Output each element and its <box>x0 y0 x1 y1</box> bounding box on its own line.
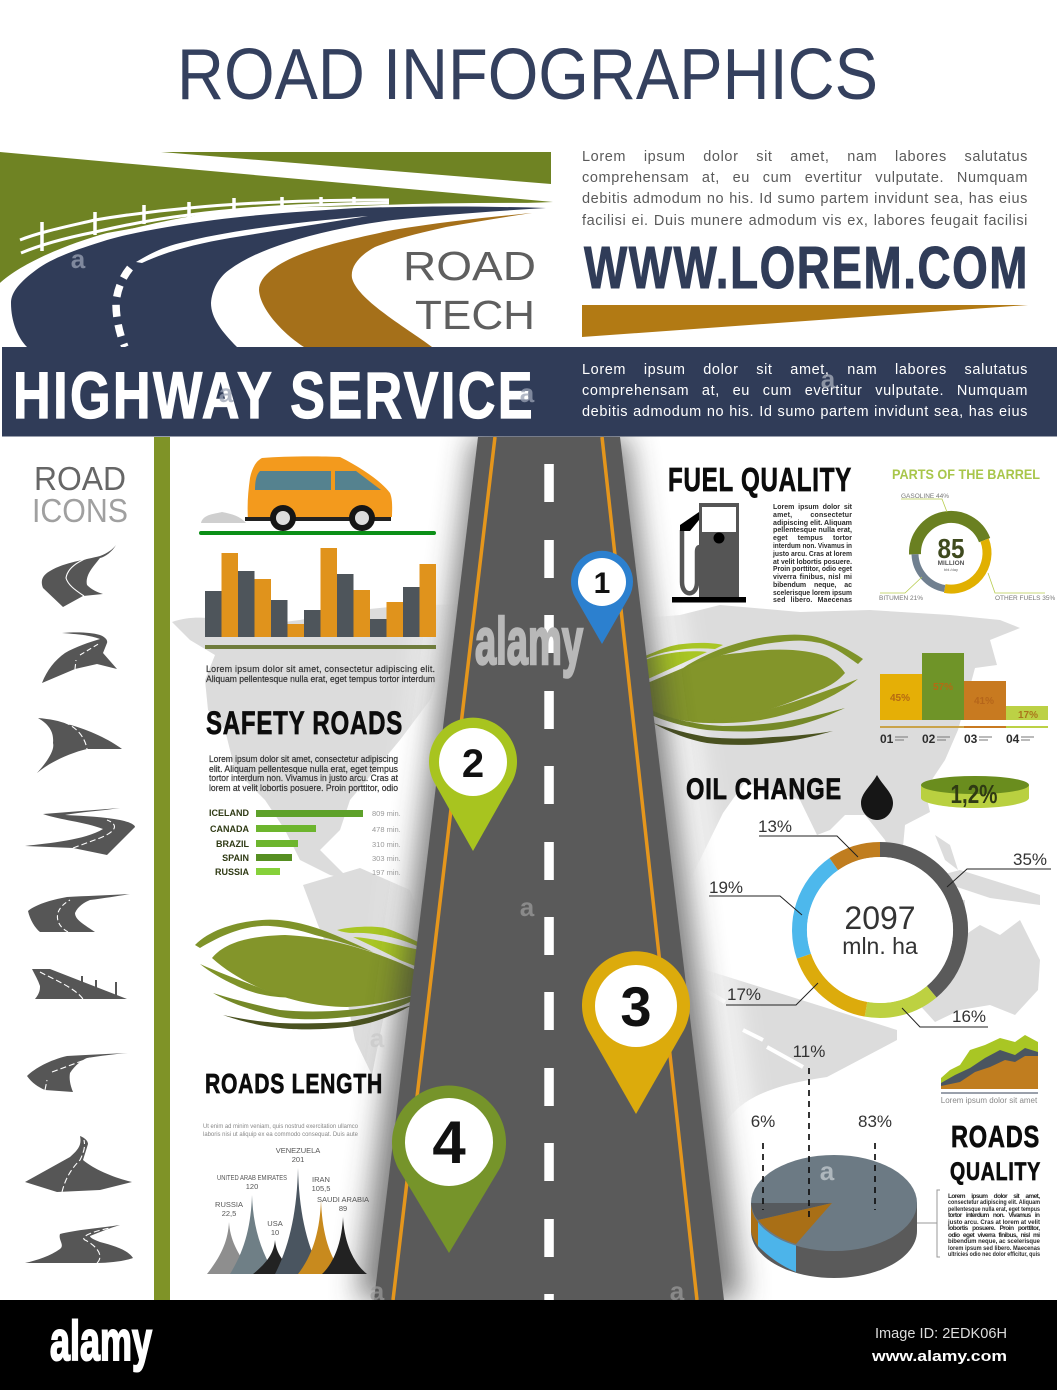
fuel quality text: bibendum neque, ac <box>773 582 852 589</box>
icon: oil drop <box>861 775 893 820</box>
header text block: debitis admodum no his. Id sumo partem invidunt sea, has eius <box>582 191 1028 207</box>
icon: van <box>199 456 436 535</box>
roads length peak chart: IRAN <box>312 1175 330 1184</box>
fuel quality text: viverra finibus, nisl mi <box>773 574 852 581</box>
fuel quality text: eget tempus tortor <box>773 535 852 542</box>
bar chart <box>205 548 436 649</box>
roads quality text: lobortis posuere. Proin porttitor, <box>948 1225 1040 1232</box>
step bar chart: 04 <box>1006 732 1020 746</box>
pin 4: 4 <box>432 1109 466 1176</box>
3d pie chart <box>751 1068 917 1278</box>
safety roads text: tortor interdum non. Vivamus in justo arcu. Cras at <box>209 773 399 783</box>
safety roads bar list <box>209 808 401 877</box>
small watermarks: a <box>520 892 535 922</box>
roads length text <box>203 1123 358 1138</box>
green leaf left <box>195 920 420 1029</box>
chart caption: Lorem ipsum dolor sit amet, consectetur adipiscing elit. <box>206 664 435 674</box>
road tech logo text: TECH <box>415 292 535 338</box>
pie percent labels: 11% <box>793 1042 825 1061</box>
step bar chart: 45% <box>890 693 910 704</box>
road shadow <box>358 437 742 1300</box>
navy road <box>11 206 546 347</box>
icon: road 4 <box>25 808 135 855</box>
barrel donut chart: GASOLINE 44% <box>901 493 949 500</box>
safety roads bar list: 478 min. <box>372 825 401 834</box>
pin 3 <box>582 951 690 1114</box>
barrel donut chart: MILLION <box>938 560 965 567</box>
roads length peak chart <box>207 1146 369 1274</box>
roads quality text: bibendum neque, ac scelerisque <box>948 1238 1040 1245</box>
roads quality text: odio eget viverra finibus, nisl mi <box>948 1232 1040 1239</box>
oil change heading: OIL CHANGE <box>686 773 842 806</box>
header road illustration <box>0 152 553 347</box>
small watermarks: a <box>370 1276 385 1306</box>
banner text block: debitis admodum no his. Id sumo partem invidunt sea, has eius <box>582 404 1028 420</box>
icon: road 1 <box>42 545 116 607</box>
header text block: Lorem ipsum dolor sit amet, nam labores salutatus <box>582 149 1028 165</box>
footer bar: Image ID: 2EDK06H <box>875 1325 1007 1342</box>
step bar chart: 01 <box>880 732 894 746</box>
oil donut chart: 35% <box>1013 850 1047 869</box>
brown lane <box>259 213 532 347</box>
oil donut chart: 13% <box>758 817 792 836</box>
safety roads text <box>209 754 399 793</box>
step bar chart: 57% <box>933 682 953 693</box>
safety roads bar list: RUSSIA <box>215 867 249 877</box>
main highway road <box>374 437 724 1302</box>
road icons column <box>25 545 135 1263</box>
roads length peak chart: 105,5 <box>312 1184 330 1193</box>
roads quality text <box>917 1190 1041 1258</box>
icon lane marks <box>40 553 114 1263</box>
oil donut chart: 17% <box>727 985 761 1004</box>
small watermarks: a <box>370 1023 385 1053</box>
fuel quality text: adipiscing elit. Aliquam <box>773 520 852 527</box>
disk 1,2%: 1,2% <box>950 779 998 809</box>
icon: road 9 <box>25 1225 133 1263</box>
icon: road 3 <box>37 718 122 773</box>
watermark: alamy <box>475 604 583 678</box>
area chart <box>941 1035 1038 1105</box>
small watermarks: a <box>520 378 535 408</box>
small watermarks: a <box>71 244 86 274</box>
roads quality text: lorem ipsum sed libero. Maecenas <box>948 1245 1040 1252</box>
fuel quality text: Proin porttitor, odio eget <box>773 566 853 573</box>
barrel donut chart: bbl./day <box>944 567 958 572</box>
step bar chart: 02 <box>922 732 936 746</box>
road icons heading: ICONS <box>32 492 128 529</box>
pin 3: 3 <box>620 975 652 1038</box>
roads length heading: ROADS LENGTH <box>205 1068 383 1099</box>
header text block: facilisi ei. Duis munere admodum vis ex, labores feugait facilisi <box>582 213 1028 229</box>
fuel quality text: justo arcu. Cras at lorem <box>772 551 852 558</box>
safety roads text: Lorem ipsum dolor sit amet, consectetur adipiscing <box>209 754 398 764</box>
oil donut chart: 19% <box>709 878 743 897</box>
barrel donut chart: 85 <box>938 533 964 564</box>
pie percent labels: 83% <box>858 1112 892 1131</box>
roads length peak chart: 120 <box>246 1182 258 1191</box>
header text block <box>582 147 1028 235</box>
pie percent labels <box>751 1042 892 1131</box>
footer bar: alamy <box>50 1309 152 1372</box>
safety roads bar list: CANADA <box>210 824 249 834</box>
fuel quality text: scelerisque lorem ipsum <box>773 590 852 597</box>
pin 4 <box>392 1086 506 1253</box>
roads length peak chart: UNITED ARAB EMIRATES <box>217 1173 287 1182</box>
area chart: Lorem ipsum dolor sit amet <box>941 1096 1038 1105</box>
roads length peak chart: USA <box>267 1219 283 1228</box>
roads quality heading <box>950 1119 1041 1186</box>
title: ROAD INFOGRAPHICS <box>177 35 878 115</box>
barrel donut chart: OTHER FUELS 35% <box>995 595 1056 602</box>
icon: road 5 <box>28 894 130 932</box>
fuel quality text <box>772 504 853 604</box>
footer bar <box>0 1300 1057 1390</box>
fuel quality text: pellentesque nulla erat, <box>773 527 852 534</box>
safety roads bar list: 310 min. <box>372 840 401 849</box>
safety roads bar list: 809 min. <box>372 809 401 818</box>
barrel donut chart: BITUMEN 21% <box>879 595 923 602</box>
banner text block <box>582 360 1028 426</box>
brown wedge <box>582 305 1028 337</box>
fence <box>20 197 389 253</box>
step bar chart: 41% <box>974 696 994 707</box>
roads length peak chart: VENEZUELA <box>276 1146 320 1155</box>
pin 1 <box>571 551 633 644</box>
step bar chart: 17% <box>1018 710 1038 721</box>
roads length text: Ut enim ad minim veniam, quis nostrud exercitation ullamco <box>203 1123 358 1130</box>
safety roads bar list: SPAIN <box>222 853 249 863</box>
step bar chart <box>880 653 1048 746</box>
small watermarks <box>71 244 836 1306</box>
safety roads bar list: 303 min. <box>372 854 401 863</box>
roads quality text: consectetur adipiscing elit. Aliquam <box>948 1199 1040 1206</box>
parts of the barrel heading: PARTS OF THE BARREL <box>892 466 1040 482</box>
oil donut chart: mln. ha <box>842 933 918 959</box>
roads length peak chart: 22,5 <box>222 1209 236 1218</box>
small watermarks: a <box>820 1156 835 1186</box>
footer bar: www.alamy.com <box>871 1348 1007 1365</box>
road icons heading <box>32 460 128 529</box>
header text block: comprehensam at, eu cum evertitur vulputate. Numquam <box>582 170 1028 186</box>
fuel quality text: interdum non. Vivamus in <box>773 543 852 550</box>
oil donut chart <box>709 817 1051 1027</box>
world map background <box>172 604 1040 1130</box>
soft white halo <box>355 437 775 1300</box>
roads length peak chart: RUSSIA <box>215 1200 243 1209</box>
icon: road 6 <box>32 969 127 999</box>
safety roads text: elit. Aliquam pellentesque nulla erat, eget tempus <box>209 764 399 774</box>
safety roads heading: SAFETY ROADS <box>206 705 403 741</box>
fuel quality text: Lorem ipsum dolor sit <box>773 504 853 511</box>
fuel quality heading: FUEL QUALITY <box>668 461 852 498</box>
chart caption <box>206 664 435 684</box>
icon: fuel pump <box>672 503 746 602</box>
road icons heading: ROAD <box>34 460 126 497</box>
roads length text: laboris nisi ut aliquip ex ea commodo consequat. Duis aute <box>203 1131 358 1138</box>
icon: road 8 <box>25 1136 132 1192</box>
roads quality text: justo arcu. Cras at lorem at velit <box>947 1219 1041 1226</box>
sidebar stripe <box>154 437 170 1300</box>
small watermarks: a <box>219 378 234 408</box>
roads length peak chart: 10 <box>271 1228 279 1237</box>
oil donut chart: 2097 <box>844 900 916 936</box>
safety roads bar list: BRAZIL <box>216 839 249 849</box>
small watermarks: a <box>670 1276 685 1306</box>
banner text block: comprehensam at, eu cum evertitur vulputate. Numquam <box>582 383 1028 399</box>
small watermarks: a <box>821 364 836 394</box>
roads length peak chart: SAUDI ARABIA <box>317 1195 369 1204</box>
fuel quality text: amet, consectetur <box>773 512 852 519</box>
roads quality text: tortor interdum non. Vivamus in <box>948 1212 1040 1219</box>
highway service heading: HIGHWAY SERVICE <box>13 358 535 432</box>
banner text block: Lorem ipsum dolor sit amet, nam labores salutatus <box>582 362 1028 378</box>
step bar chart: 03 <box>964 732 978 746</box>
roads length peak chart: 89 <box>339 1204 347 1213</box>
disk 1,2% <box>921 776 1029 809</box>
safety roads bar list: ICELAND <box>209 808 249 818</box>
barrel donut chart <box>879 493 1056 602</box>
highway service banner <box>2 347 1057 436</box>
roads length peak chart: 201 <box>292 1155 304 1164</box>
road tech logo text: ROAD <box>403 243 536 289</box>
chart caption: Aliquam pellentesque nulla erat, eget tempus tortor interdum <box>206 674 435 684</box>
roads quality text: Lorem ipsum dolor sit amet, <box>948 1193 1040 1200</box>
icon: road 7 <box>27 1053 128 1092</box>
pie percent labels: 6% <box>751 1112 775 1131</box>
road tech logo text <box>403 243 536 338</box>
safety roads text: lorem at velit lobortis posuere. Proin porttitor, odio <box>209 783 398 793</box>
safety roads bar list: 197 min. <box>372 868 401 877</box>
green leaf right <box>645 635 863 745</box>
pin 2: 2 <box>462 742 484 786</box>
pin 2 <box>429 718 517 851</box>
roads quality text: pellentesque nulla erat, eget tempus <box>948 1206 1040 1213</box>
oil donut chart: 16% <box>952 1007 986 1026</box>
fuel quality text: sed libero. Maecenas <box>773 597 852 604</box>
icon: road 2 <box>42 632 117 683</box>
fuel quality text: at velit lobortis posuere. <box>773 559 852 566</box>
pin 1: 1 <box>594 567 610 600</box>
